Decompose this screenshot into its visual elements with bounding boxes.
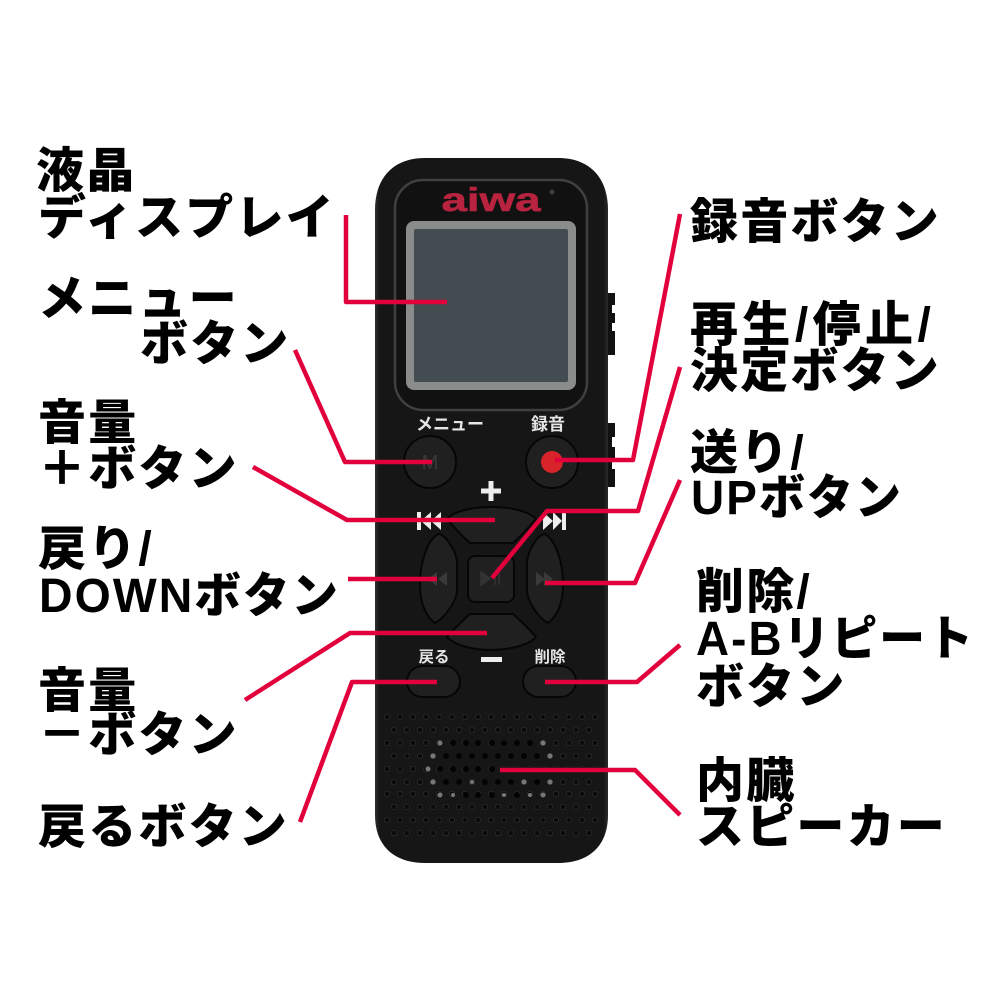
menu button: M <box>422 452 438 474</box>
back and forward glyphs <box>428 572 447 586</box>
skip forward icon <box>543 512 566 530</box>
label: menu button <box>38 273 291 371</box>
volume up button <box>447 507 536 543</box>
leader line: volume up <box>253 467 495 520</box>
leader line: delete <box>545 645 680 682</box>
speaker center dark holes <box>437 740 540 798</box>
label: play stop button <box>690 299 941 398</box>
label: play stop button: 決定ボタン <box>690 345 941 398</box>
minus symbol <box>481 657 502 662</box>
label: forward up button: UPボタン <box>691 472 903 525</box>
lcd screen <box>406 221 576 390</box>
label: volume up button <box>38 397 239 496</box>
label: back down button: DOWNボタン <box>39 570 340 623</box>
label: display: ディスプレイ <box>38 191 336 245</box>
label: volume down button <box>38 665 239 762</box>
label: speaker: 内臓 <box>696 755 796 808</box>
delete button: 削除 <box>534 648 566 666</box>
label: menu button: メニュー <box>38 273 239 326</box>
label: return button: 戻るボタン <box>38 801 289 854</box>
label: volume down button: 音量 <box>38 665 138 718</box>
label: volume down button: －ボタン <box>38 709 239 762</box>
recorder device <box>375 158 615 863</box>
leader line: forward up <box>545 480 680 583</box>
leader line: play stop <box>492 367 680 578</box>
label: forward up button <box>690 427 903 525</box>
label: delete button <box>696 566 975 714</box>
label: delete button: A-Bリピート <box>696 613 975 666</box>
speaker grille <box>384 714 598 836</box>
label: back down button: 戻り/ <box>38 523 154 576</box>
label: speaker: スピーカー <box>696 801 947 854</box>
label: speaker <box>696 755 947 854</box>
record button: 録音 <box>531 414 565 434</box>
volume down button <box>447 614 536 650</box>
label: menu button: ボタン <box>140 318 291 371</box>
display bezel <box>395 180 587 410</box>
menu button: メニュー <box>416 415 484 434</box>
return button: 戻る <box>418 649 450 666</box>
record button <box>526 414 578 488</box>
label: back down button <box>38 523 340 623</box>
back down button <box>420 534 457 623</box>
speaker center highlights <box>426 740 552 798</box>
label: delete button: 削除/ <box>696 566 812 619</box>
device body <box>375 158 608 863</box>
camera dot <box>550 190 554 194</box>
label: volume up button: ＋ボタン <box>38 443 239 496</box>
label: volume up button: 音量 <box>38 397 138 450</box>
label: record button: 録音ボタン <box>690 196 941 249</box>
plus symbol <box>481 481 501 501</box>
leader line: display <box>346 215 447 302</box>
leader line: record <box>555 214 680 460</box>
label: delete button: ボタン <box>696 661 847 714</box>
menu button <box>404 415 484 488</box>
skip back icon <box>417 512 441 530</box>
forward up button <box>527 534 563 623</box>
leader line: volume down <box>245 633 487 700</box>
leader line: speaker <box>500 770 680 815</box>
leader line: back down <box>348 577 437 581</box>
leader line: return <box>300 682 437 822</box>
label: forward up button: 送り/ <box>690 427 806 480</box>
delete button <box>523 648 576 697</box>
center play button <box>468 556 514 602</box>
aiwa logo: aiwa <box>442 181 541 218</box>
label: play stop button: 再生/停止/ <box>690 299 933 352</box>
return button <box>407 649 460 697</box>
leader line: menu <box>295 350 432 462</box>
label: display <box>36 145 336 245</box>
label: display: 液晶 <box>36 145 136 198</box>
side switch <box>608 293 615 487</box>
